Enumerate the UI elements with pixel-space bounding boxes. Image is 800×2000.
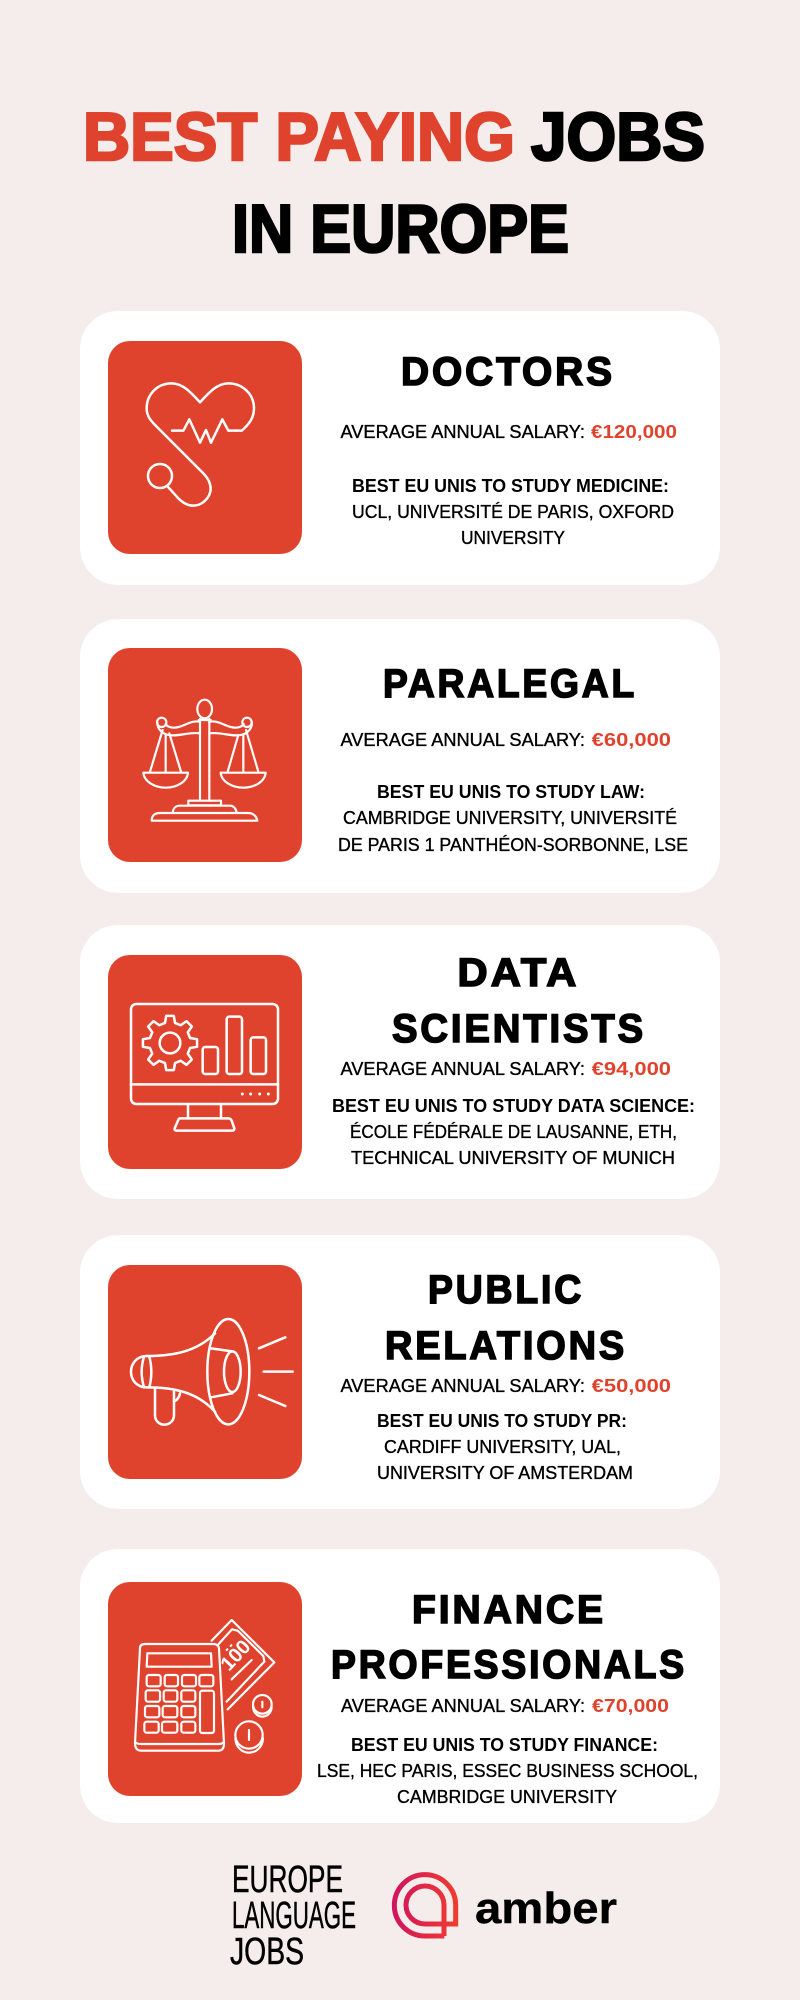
logo: Europe Language Jobs [230,1859,356,1973]
salary: data scientists: €94,000 [592,1058,671,1079]
universities: doctors: UCL, UNIVERSITÉ DE PARIS, OXFORD [352,501,674,522]
universities: doctors: BEST EU UNIS TO STUDY MEDICINE: [352,475,669,496]
salary: public relations: €50,000 [592,1375,671,1396]
universities: data scientists: TECHNICAL UNIVERSITY OF MUNICH [351,1147,675,1168]
universities: doctors: UNIVERSITY [461,527,565,548]
universities: doctors [352,475,674,548]
icon: calculator, banknote and coins [108,1582,302,1796]
salary: paralegal: AVERAGE ANNUAL SALARY: [340,729,585,750]
logo: Europe Language Jobs: JOBS [230,1931,304,1973]
title: JOBS [531,99,705,175]
icon: megaphone [108,1265,302,1479]
icon: heart stethoscope [108,341,302,554]
universities: data scientists [332,1095,695,1168]
logo: amber [394,1875,617,1936]
icon: amber mark [394,1875,456,1936]
logo: Europe Language Jobs: LANGUAGE [232,1895,356,1937]
panel: doctors [80,311,720,585]
universities: finance professionals [317,1734,698,1807]
universities: finance professionals: BEST EU UNIS TO STUDY FINANCE: [351,1734,658,1755]
heading: doctors: DOCTORS [401,350,615,394]
heading: public relations [385,1268,627,1368]
panel: finance professionals [80,1549,720,1823]
heading: data scientists: DATA [458,951,580,995]
universities: data scientists: BEST EU UNIS TO STUDY DATA SCIENCE: [332,1095,695,1116]
heading: public relations: RELATIONS [385,1324,627,1368]
salary: finance professionals: AVERAGE ANNUAL SALARY: [341,1695,585,1716]
wordmark: amber: amber [475,1884,617,1933]
title: BEST PAYING [83,99,515,175]
title [83,99,705,267]
heading: finance professionals: PROFESSIONALS [331,1643,687,1687]
heading: paralegal: PARALEGAL [383,662,637,706]
universities: public relations: BEST EU UNIS TO STUDY PR: [377,1410,627,1431]
universities: public relations: UNIVERSITY OF AMSTERDAM [377,1462,633,1483]
universities: finance professionals: CAMBRIDGE UNIVERSITY [397,1786,617,1807]
title: IN EUROPE [232,191,569,267]
universities: paralegal: DE PARIS 1 PANTHÉON-SORBONNE, LSE [338,834,688,855]
universities: paralegal [338,781,688,855]
salary: public relations: AVERAGE ANNUAL SALARY: [340,1375,585,1396]
panel: paralegal [80,619,720,893]
universities: paralegal: CAMBRIDGE UNIVERSITY, UNIVERSITÉ [343,807,677,828]
icon: scales of justice [108,648,302,862]
salary: doctors: AVERAGE ANNUAL SALARY: [340,421,585,442]
universities: data scientists: ÉCOLE FÉDÉRALE DE LAUSANNE, ETH, [350,1121,677,1142]
banknote value: 100 [217,1636,255,1675]
icon: monitor with gear and bars [108,955,302,1169]
salary: doctors: €120,000 [591,421,677,442]
heading: finance professionals [331,1588,687,1687]
panel: data scientists [80,925,720,1199]
salary: data scientists: AVERAGE ANNUAL SALARY: [340,1058,585,1079]
panel: public relations [80,1235,720,1509]
heading: finance professionals: FINANCE [412,1588,606,1632]
heading: data scientists: SCIENTISTS [392,1007,646,1051]
universities: public relations: CARDIFF UNIVERSITY, UAL, [384,1436,621,1457]
universities: public relations [377,1410,633,1483]
salary: paralegal: €60,000 [592,729,671,750]
universities: paralegal: BEST EU UNIS TO STUDY LAW: [377,781,645,802]
heading: data scientists [392,951,646,1051]
logo: Europe Language Jobs: EUROPE [232,1859,343,1901]
universities: finance professionals: LSE, HEC PARIS, ESSEC BUSINESS SCHOOL, [317,1760,698,1781]
salary: finance professionals: €70,000 [592,1695,669,1716]
heading: public relations: PUBLIC [428,1268,584,1312]
